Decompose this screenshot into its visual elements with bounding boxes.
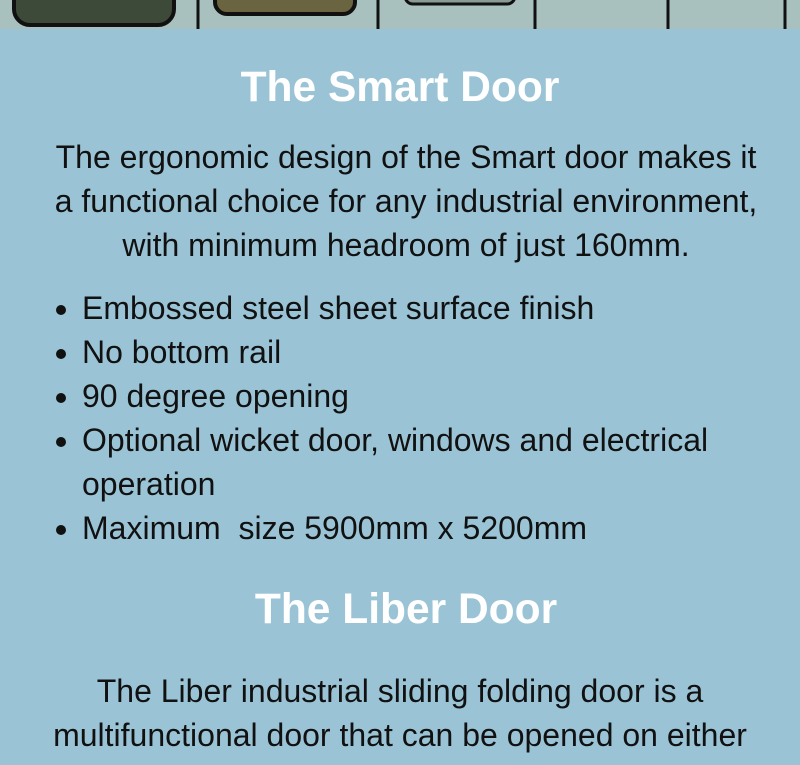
list: smart door features: Maximum size 5900mm x 5200mm <box>82 510 587 546</box>
list: smart door features: Embossed steel sheet surface finish <box>82 290 594 326</box>
heading: The Liber Door: The Liber Door <box>255 586 557 633</box>
list: smart door features: 90 degree opening <box>82 378 349 414</box>
text: smart door description: The ergonomic design of the Smart door makes it a functional choice for any industrial environment, with minimum headroom of just 160mm. <box>55 139 757 263</box>
list: smart door features <box>56 290 708 546</box>
text: liber door description: The Liber industrial sliding folding door is a multifunctional door that can be opened on either <box>53 673 747 753</box>
list: smart door features: Optional wicket door, windows and electrical operation <box>82 422 708 502</box>
list: smart door features: No bottom rail <box>82 334 281 370</box>
photo strip <box>0 0 800 29</box>
heading: The Smart Door: The Smart Door <box>241 64 559 111</box>
